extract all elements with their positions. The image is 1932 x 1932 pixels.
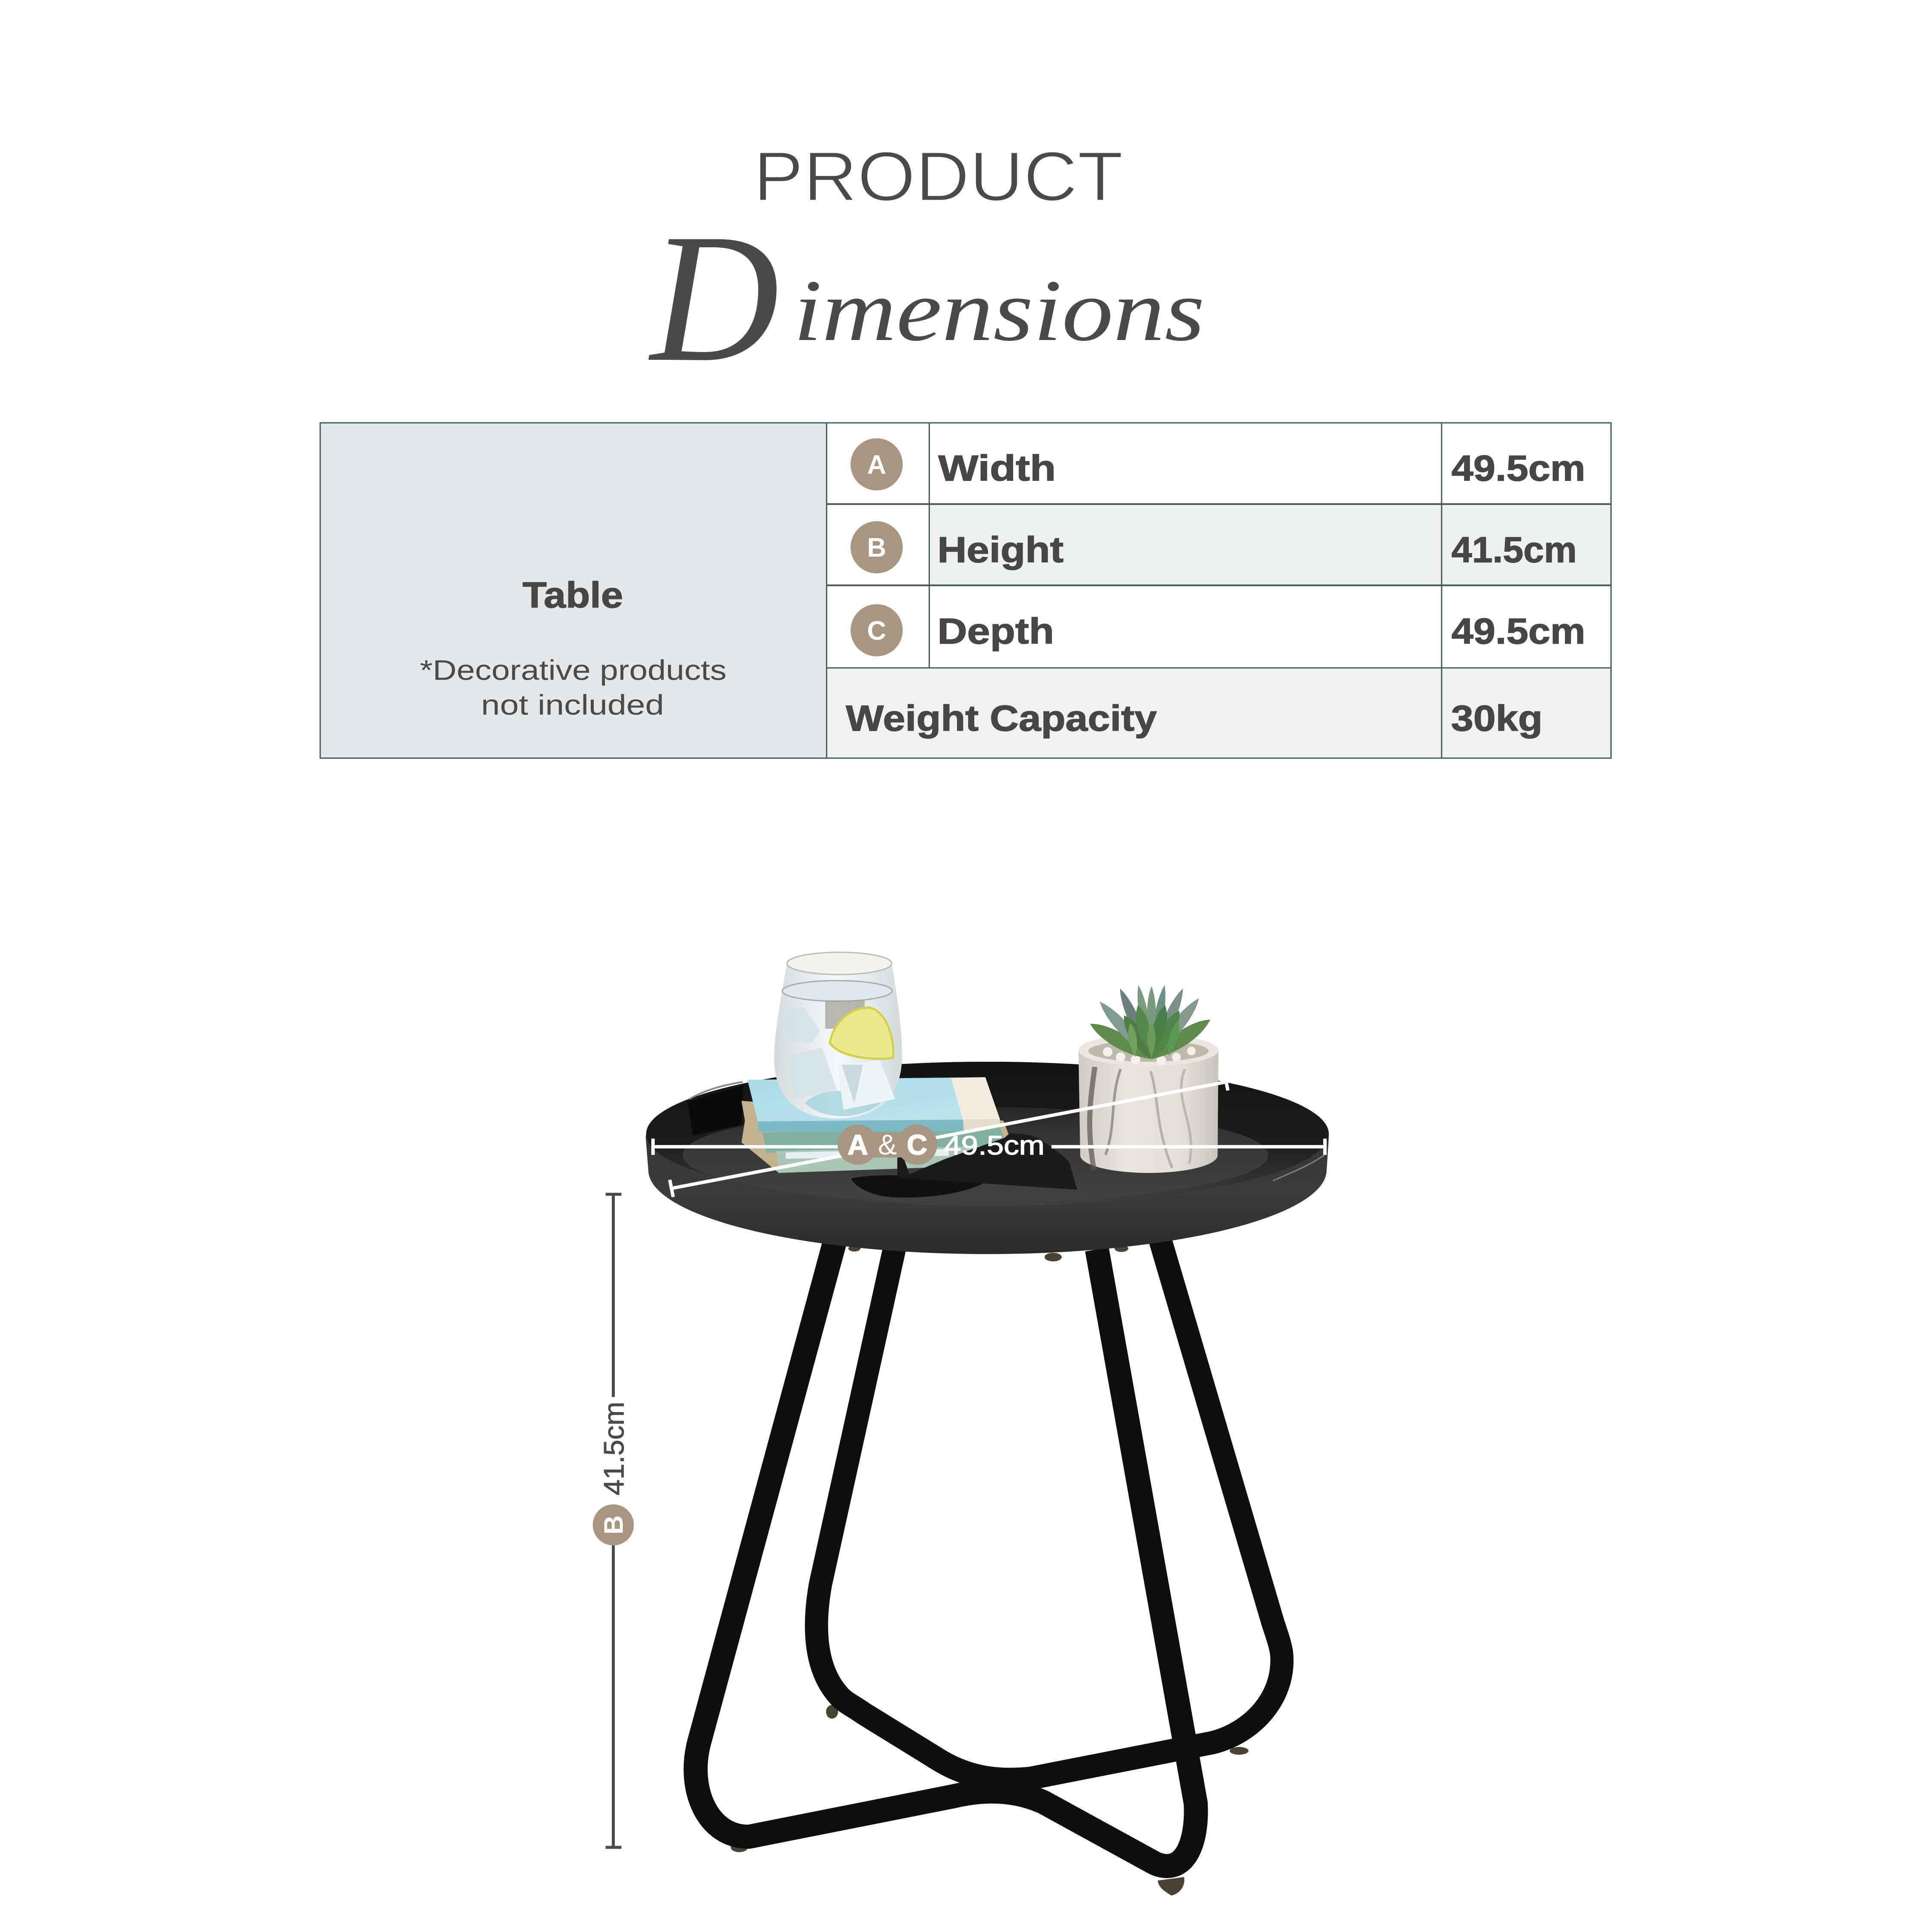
- badge B: [593, 1504, 634, 1546]
- row: height: B: [867, 533, 886, 563]
- badges A and C: C: [907, 1129, 927, 1160]
- row shading: height: [929, 504, 1611, 585]
- row: width: Width: [938, 447, 1056, 488]
- marble plant pot: [1078, 1034, 1218, 1173]
- row: height: [851, 521, 1577, 574]
- round tray table top: [646, 1062, 1329, 1254]
- row: depth: 49.5cm: [1452, 611, 1586, 651]
- height dimension line: [593, 1194, 634, 1847]
- title line: Dimensions: D: [648, 196, 779, 400]
- title line: Dimensions: imensions: [793, 262, 1205, 359]
- dimensions table: [320, 423, 1611, 758]
- product illustration: side table: [593, 952, 1329, 1896]
- row: width: A: [867, 450, 886, 480]
- badges A and C: [838, 1124, 937, 1165]
- dark object on tray: [897, 1133, 1077, 1190]
- left panel label: *Decorative products: [420, 654, 726, 686]
- badge B: B: [599, 1515, 629, 1534]
- left panel label: [420, 574, 726, 720]
- width and depth dimension lines: [653, 1073, 1325, 1197]
- table left panel: [320, 423, 826, 758]
- row: depth: [851, 604, 1586, 656]
- row: depth: C: [867, 616, 886, 646]
- badges A and C: A: [848, 1129, 868, 1160]
- table legs and feet: [696, 1236, 1282, 1896]
- row: depth: Depth: [937, 611, 1054, 651]
- row: width: 49.5cm: [1452, 447, 1586, 488]
- title line: PRODUCT: PRODUCT: [753, 137, 1123, 216]
- title: [648, 137, 1205, 400]
- row: height: 41.5cm: [1452, 529, 1577, 570]
- row: weight capacity: Weight Capacity: [846, 698, 1157, 738]
- badges A and C: &: [878, 1129, 897, 1160]
- succulent plant: [1086, 984, 1214, 1066]
- table grid lines: [320, 423, 1611, 758]
- width and depth value: 49.5cm: [944, 1131, 1045, 1160]
- left panel label: Table: [522, 574, 623, 615]
- height value: 41.5cm: [598, 1402, 629, 1495]
- left panel label: not included: [481, 689, 664, 720]
- row: height: Height: [937, 529, 1063, 570]
- row: weight capacity: 30kg: [1451, 698, 1543, 738]
- row: width: [851, 438, 1586, 490]
- glass of water with lemon: [774, 952, 902, 1118]
- row: weight capacity: [846, 698, 1543, 738]
- stacked books: [741, 1077, 1016, 1173]
- row shading: weight capacity: [826, 668, 1611, 758]
- title line: Dimensions: [648, 196, 1205, 400]
